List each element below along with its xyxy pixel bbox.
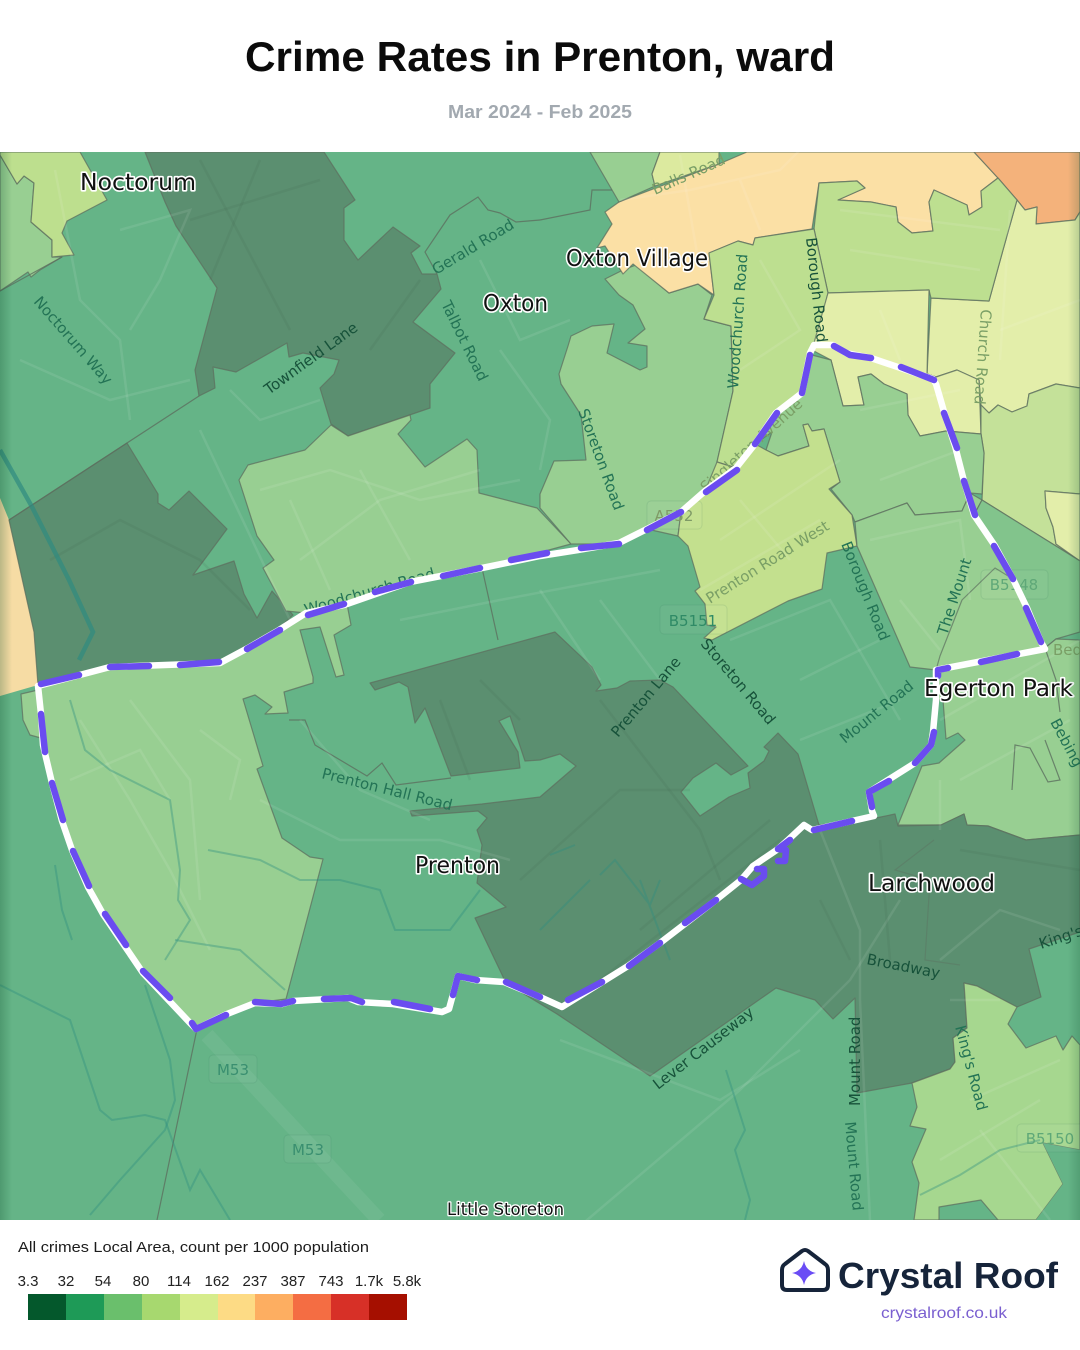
wordmark: Crystal Roof <box>838 1255 1059 1296</box>
legend tick labels: 32 <box>58 1273 74 1290</box>
legend tick labels: 80 <box>133 1273 149 1290</box>
title: Crime Rates in Prenton, ward <box>245 33 835 80</box>
road labels: Borough Road <box>837 539 893 643</box>
road labels: Borough Road <box>802 237 831 343</box>
legend tick labels <box>18 1273 422 1290</box>
place labels: Larchwood <box>868 871 995 897</box>
road labels <box>30 150 1080 1211</box>
road number badges: B5150 <box>1026 1130 1074 1148</box>
place labels <box>80 170 1074 1220</box>
place labels: Oxton Village <box>566 246 708 272</box>
legend tick labels: 743 <box>318 1273 344 1290</box>
rivers <box>0 700 1040 1220</box>
road labels: Woodchurch Road <box>302 564 437 619</box>
place labels: Egerton Park <box>924 676 1074 702</box>
legend tick labels: 387 <box>280 1273 306 1290</box>
road labels: Prenton Hall Road <box>320 764 454 814</box>
road labels: Mount Road <box>841 1121 867 1211</box>
icon: house with star <box>782 1250 828 1290</box>
subtitle: date range: Mar 2024 - Feb 2025 <box>448 102 632 122</box>
legend tick labels: 237 <box>242 1273 268 1290</box>
ward boundary: Prenton <box>38 345 1045 1029</box>
road labels: Broadway <box>865 950 942 982</box>
road number badges: B5148 <box>990 576 1038 594</box>
road labels: Townfield Lane <box>260 318 361 399</box>
road number badges: B5151 <box>669 612 717 630</box>
legend tick labels: 5.8k <box>393 1273 422 1290</box>
place labels: Little Storeton <box>447 1200 564 1220</box>
legend tick labels: 162 <box>204 1273 230 1290</box>
road labels: Singleton Avenue <box>697 395 806 496</box>
legend <box>18 1239 422 1320</box>
road labels: Noctorum Way <box>30 293 116 388</box>
legend title: All crimes Local Area, count per 1000 population <box>18 1239 369 1256</box>
legend tick labels: 3.3 <box>18 1273 38 1290</box>
logo: Crystal Roof <box>782 1250 1059 1322</box>
place labels: Noctorum <box>80 170 196 196</box>
road labels: Woodchurch Road <box>724 253 751 389</box>
place labels: Prenton <box>415 853 500 879</box>
legend tick labels: 54 <box>95 1273 111 1290</box>
place labels: Oxton <box>483 291 548 317</box>
road number badges <box>209 501 1080 1163</box>
road labels: Lever Causeway <box>649 1003 757 1093</box>
road number badges: M53 <box>292 1141 324 1159</box>
road labels: Gerald Road <box>429 215 517 278</box>
legend tick labels: 114 <box>167 1273 191 1290</box>
road labels: Talbot Road <box>437 297 492 384</box>
road number badges: A552 <box>655 507 693 525</box>
road labels: Mount Road <box>836 677 917 747</box>
road labels: The Mount <box>933 556 975 638</box>
road number badges: M53 <box>217 1061 249 1079</box>
road labels: Storeton Road <box>574 406 628 513</box>
map areas <box>0 152 1080 1220</box>
legend colour scale <box>28 1294 407 1320</box>
website: crystalroof.co.uk <box>881 1305 1008 1322</box>
legend tick labels: 1.7k <box>355 1273 384 1290</box>
road labels: Mount Road <box>846 1017 864 1106</box>
road labels: Prenton Road West <box>703 517 833 607</box>
road labels: Prenton Lane <box>607 653 685 741</box>
road labels: Balls Road <box>649 150 728 199</box>
road labels: Church Road <box>970 309 995 405</box>
boundary lines <box>0 190 1060 1220</box>
road labels: King's Road <box>951 1023 991 1112</box>
road labels: Storeton Road <box>697 635 779 728</box>
